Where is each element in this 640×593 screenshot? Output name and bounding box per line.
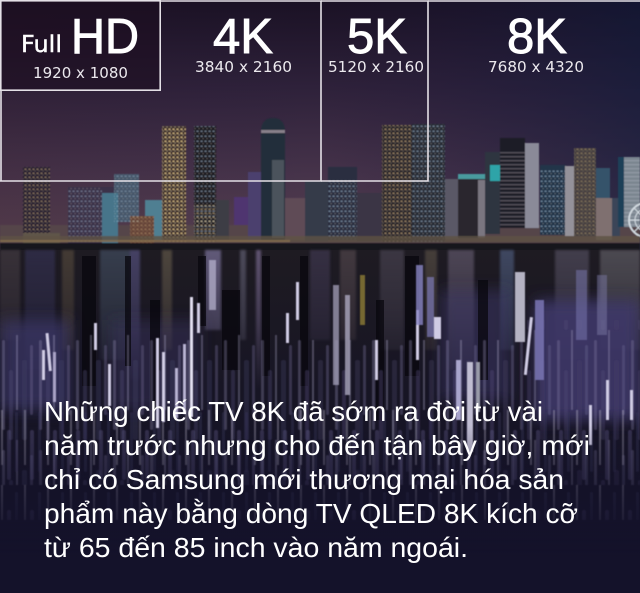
building: central pair xyxy=(328,124,445,242)
building: tower one xyxy=(162,126,186,242)
dense lower bars xyxy=(0,320,640,520)
distant low buildings xyxy=(0,172,640,245)
bottom fade xyxy=(0,425,640,593)
label: 8K xyxy=(488,10,584,76)
label: Full HD: HD xyxy=(71,10,139,64)
left dark vertical bands xyxy=(82,256,488,420)
body paragraph xyxy=(44,396,590,563)
resolution frame: 5K xyxy=(321,1,428,181)
label: 5K: 5120 x 2160 xyxy=(328,58,424,76)
label: 8K: 7680 x 4320 xyxy=(488,58,584,76)
soft building reflections xyxy=(0,250,640,390)
label: 4K xyxy=(195,10,292,76)
building: left tower xyxy=(23,167,60,243)
label: Full HD: 1920 x 1080 xyxy=(33,64,128,82)
shore lights xyxy=(0,236,640,251)
body paragraph: phẩm này bằng dòng TV QLED 8K kích cỡ xyxy=(44,498,578,529)
label: 5K: 5K xyxy=(347,10,407,64)
building: tower two xyxy=(194,126,216,242)
building: domed tower xyxy=(261,118,285,240)
label: 4K: 4K xyxy=(213,10,273,64)
ferris wheel xyxy=(629,203,640,237)
city skyline xyxy=(0,118,640,251)
label: 5K xyxy=(328,10,424,76)
purple haze patches xyxy=(0,290,640,420)
label: Full HD: Full xyxy=(21,32,62,58)
building: right cluster xyxy=(458,138,640,240)
sky background xyxy=(0,0,640,250)
label: Full HD xyxy=(21,10,139,82)
label: 4K: 3840 x 2160 xyxy=(195,58,292,76)
body paragraph: từ 65 đến 85 inch vào năm ngoái. xyxy=(44,532,468,563)
body paragraph: Những chiếc TV 8K đã sớm ra đời từ vài xyxy=(44,396,543,427)
body paragraph: chỉ có Samsung mới thương mại hóa sản xyxy=(44,464,564,495)
body paragraph: năm trước nhưng cho đến tận bây giờ, mới xyxy=(44,430,590,461)
building: left cluster windows xyxy=(68,174,154,243)
resolution frame: Full HD xyxy=(1,1,160,90)
bright light streaks xyxy=(42,260,633,452)
label: 8K: 8K xyxy=(507,10,567,64)
resolution frame: 4K xyxy=(0,1,321,181)
resolution frame: 8K xyxy=(428,1,640,76)
water and light streak field xyxy=(0,248,640,520)
